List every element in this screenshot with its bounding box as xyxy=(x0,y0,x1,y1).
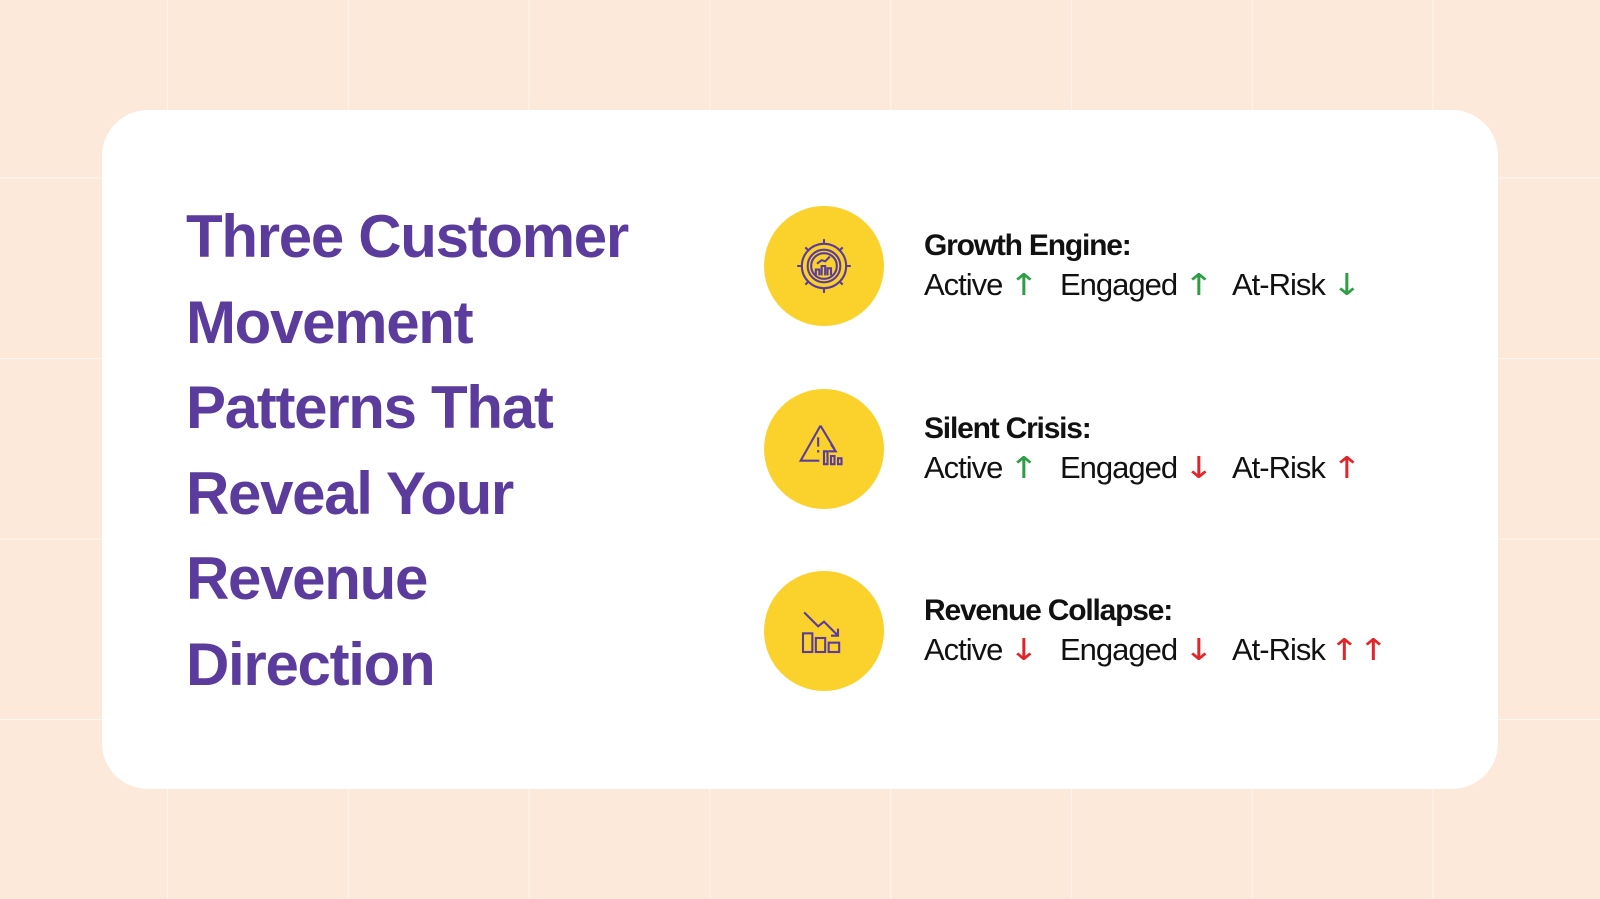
row: revenue collapse: ↓ xyxy=(1009,633,1038,668)
row: silent crisis: ↑ xyxy=(1331,451,1360,486)
row: silent crisis: ↓ xyxy=(1183,451,1212,486)
card panel xyxy=(102,110,1498,789)
title: Movement xyxy=(186,288,472,356)
row: silent crisis: ↑ xyxy=(1009,451,1038,486)
row: growth engine: Growth Engine: xyxy=(924,229,1131,262)
row: growth engine xyxy=(924,229,1360,303)
title: Reveal Your xyxy=(186,460,513,526)
row: growth engine: ↑ xyxy=(1009,268,1038,303)
row: revenue collapse: Engaged xyxy=(1060,632,1177,667)
row: growth engine: ↑ xyxy=(1183,268,1212,303)
title: Revenue xyxy=(186,545,427,612)
row: revenue collapse: ↓ xyxy=(1183,633,1212,668)
row: silent crisis: At-Risk xyxy=(1232,450,1325,485)
row: revenue collapse: ↑↑ xyxy=(1329,633,1387,668)
row: revenue collapse: Active xyxy=(924,632,1002,667)
row: growth engine: At-Risk xyxy=(1232,267,1325,302)
row: revenue collapse xyxy=(924,594,1387,668)
title: Direction xyxy=(186,630,434,698)
title xyxy=(186,203,628,698)
row: silent crisis: Silent Crisis: xyxy=(924,412,1091,445)
row: silent crisis: Engaged xyxy=(1060,450,1177,485)
row: growth engine: ↓ xyxy=(1331,268,1360,303)
icon: gear with chart xyxy=(764,206,884,326)
icon: warning with declining bars xyxy=(764,389,884,509)
row: silent crisis: Active xyxy=(924,450,1002,485)
row: silent crisis xyxy=(924,412,1360,486)
icon: collapsing bars xyxy=(764,571,884,691)
title: Patterns That xyxy=(186,374,553,441)
row: revenue collapse: Revenue Collapse: xyxy=(924,594,1172,627)
row: growth engine: Engaged xyxy=(1060,267,1177,302)
row: revenue collapse: At-Risk xyxy=(1232,632,1325,667)
row: growth engine: Active xyxy=(924,267,1002,302)
title: Three Customer xyxy=(186,203,628,270)
